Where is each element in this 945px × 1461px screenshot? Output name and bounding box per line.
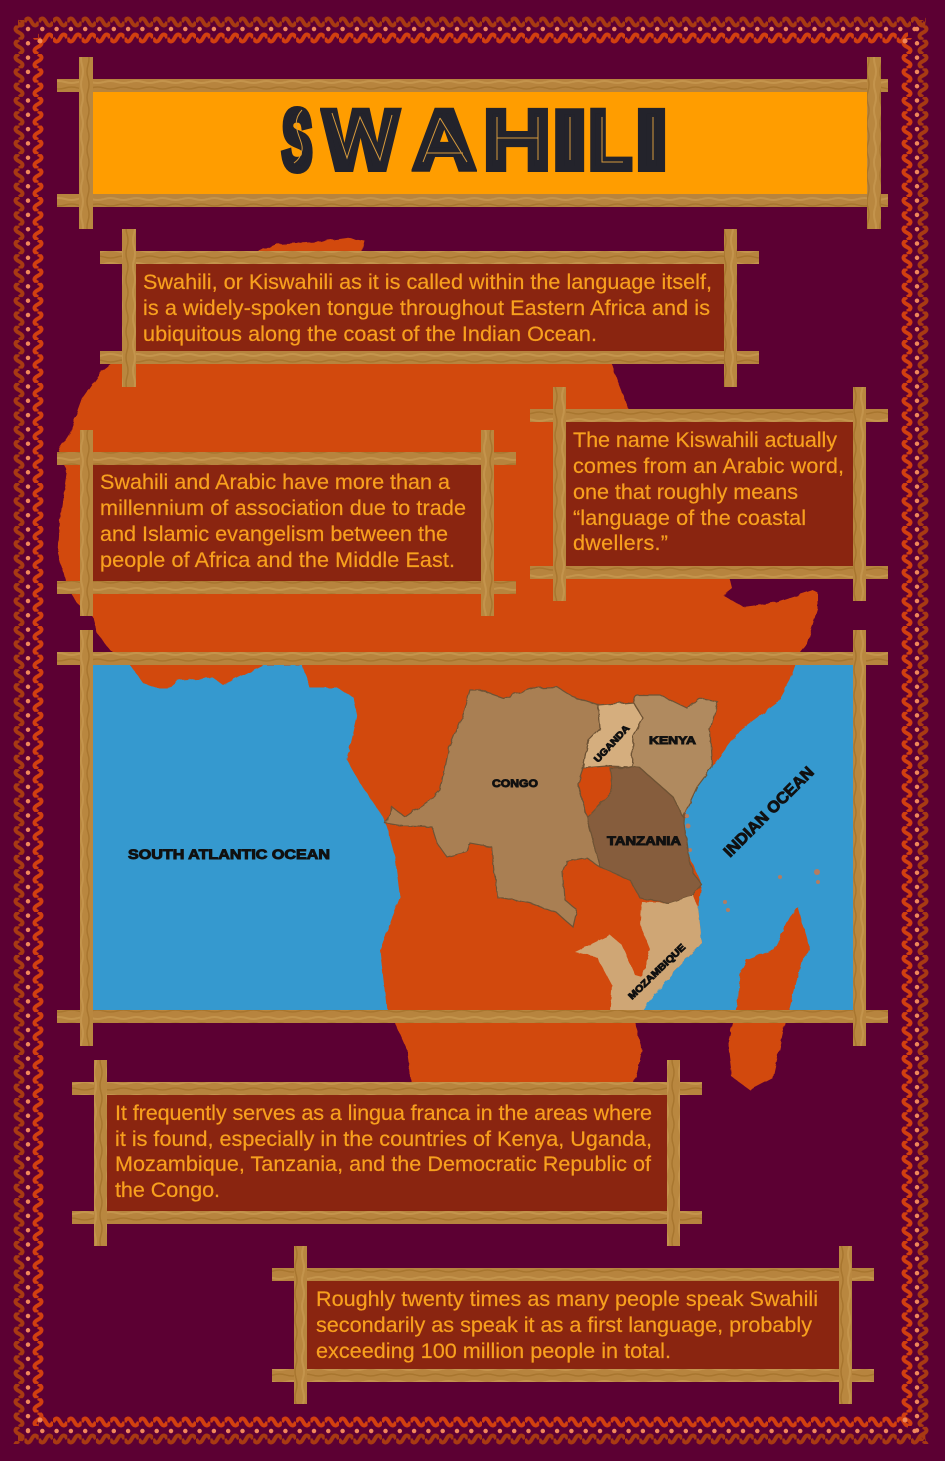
text block: intro: Swahili, or Kiswahili as it is called within the language itself, [143, 269, 712, 294]
panel: Arabic association [57, 430, 516, 616]
text block: name origin: one that roughly means [573, 479, 798, 504]
label: South Atlantic Ocean: SOUTH ATLANTIC OCEAN [128, 847, 330, 862]
text block: lingua franca: Mozambique, Tanzania, and the Democratic Republic of [115, 1151, 652, 1176]
panel: speakers [272, 1246, 874, 1404]
text block: intro [143, 269, 712, 346]
map labels [128, 723, 818, 1002]
map: small islands [685, 814, 820, 912]
text block: name origin: comes from an Arabic word, [573, 453, 844, 478]
map frame [57, 630, 888, 1046]
text block: Arabic association: millennium of association due to trade [100, 495, 466, 520]
panel: intro text [100, 229, 759, 387]
text block: Arabic association: Swahili and Arabic have more than a [100, 469, 451, 494]
text block: name origin: dwellers.” [573, 530, 668, 555]
text block: lingua franca: the Congo. [115, 1177, 220, 1202]
country: Uganda [583, 702, 643, 768]
panel: title banner [57, 57, 888, 229]
country: Kenya [632, 695, 718, 817]
label: Congo: CONGO [492, 778, 538, 790]
map: Madagascar [728, 907, 810, 1090]
country: Congo [385, 687, 600, 927]
label: Kenya: KENYA [649, 735, 696, 747]
text block: intro: ubiquitous along the coast of the Indian Ocean. [143, 321, 597, 346]
label: Tanzania: TANZANIA [607, 836, 681, 848]
label: Uganda: UGANDA [592, 723, 632, 765]
text block: Arabic association: people of Africa and the Middle East. [100, 547, 455, 572]
label: Indian Ocean: INDIAN OCEAN [721, 764, 818, 861]
label: Mozambique: MOZAMBIQUE [626, 942, 688, 1002]
text block: speakers: Roughly twenty times as many people speak Swahili [316, 1286, 818, 1311]
text block: name origin [573, 427, 844, 555]
text block: speakers: exceeding 100 million people in total. [316, 1338, 671, 1363]
text block: lingua franca [115, 1100, 652, 1202]
panel: name origin [530, 387, 888, 601]
text block: speakers: secondarily as speak it as a first language, probably [316, 1312, 812, 1337]
text block: intro: is a widely-spoken tongue throughout Eastern Africa and is [143, 295, 710, 320]
country: Tanzania [587, 767, 702, 903]
text block: speakers [316, 1286, 818, 1363]
text block: Arabic association: and Islamic evangelism between the [100, 521, 448, 546]
text block: lingua franca: It frequently serves as a lingua franca in the areas where [115, 1100, 652, 1125]
map water: ocean panel [93, 665, 853, 1010]
map: countries [385, 687, 718, 1012]
country: Mozambique [575, 895, 702, 1012]
text block: name origin: The name Kiswahili actually [573, 427, 837, 452]
text block: lingua franca: it is found, especially in the countries of Kenya, Uganda, [115, 1126, 652, 1151]
text block: Arabic association [100, 469, 466, 572]
text block: name origin: “language of the coastal [573, 505, 806, 530]
panel: lingua franca [72, 1060, 702, 1246]
title [270, 95, 680, 180]
map: Africa landmass [57, 238, 818, 1088]
